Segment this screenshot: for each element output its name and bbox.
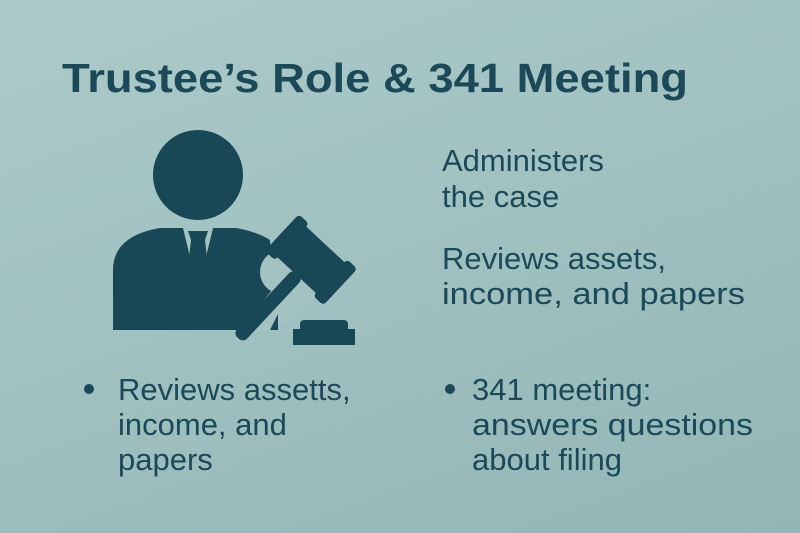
bullet: reviews assets: income, and: [118, 407, 287, 442]
bullet: reviews assets: Reviews assetts,: [118, 372, 351, 407]
bullet: 341 meeting: answers questions: [472, 407, 753, 442]
bullet: reviews assets: [84, 372, 351, 477]
title: Trustee’s Role & 341 Meeting: [62, 55, 688, 101]
icon: trustee with gavel: [113, 130, 357, 365]
bullet: reviews assets: papers: [118, 442, 213, 477]
bullet: 341 meeting: about filing: [472, 442, 622, 477]
bullet: 341 meeting: [445, 372, 753, 477]
text block: administers: Administers: [442, 143, 604, 178]
text block: reviews: income, and papers: [442, 276, 745, 311]
text block: administers: [442, 143, 604, 214]
text block: reviews: [442, 241, 745, 311]
text block: reviews: Reviews assets,: [442, 241, 666, 276]
bullet: 341 meeting: 341 meeting:: [472, 372, 651, 407]
text block: administers: the case: [442, 179, 559, 214]
